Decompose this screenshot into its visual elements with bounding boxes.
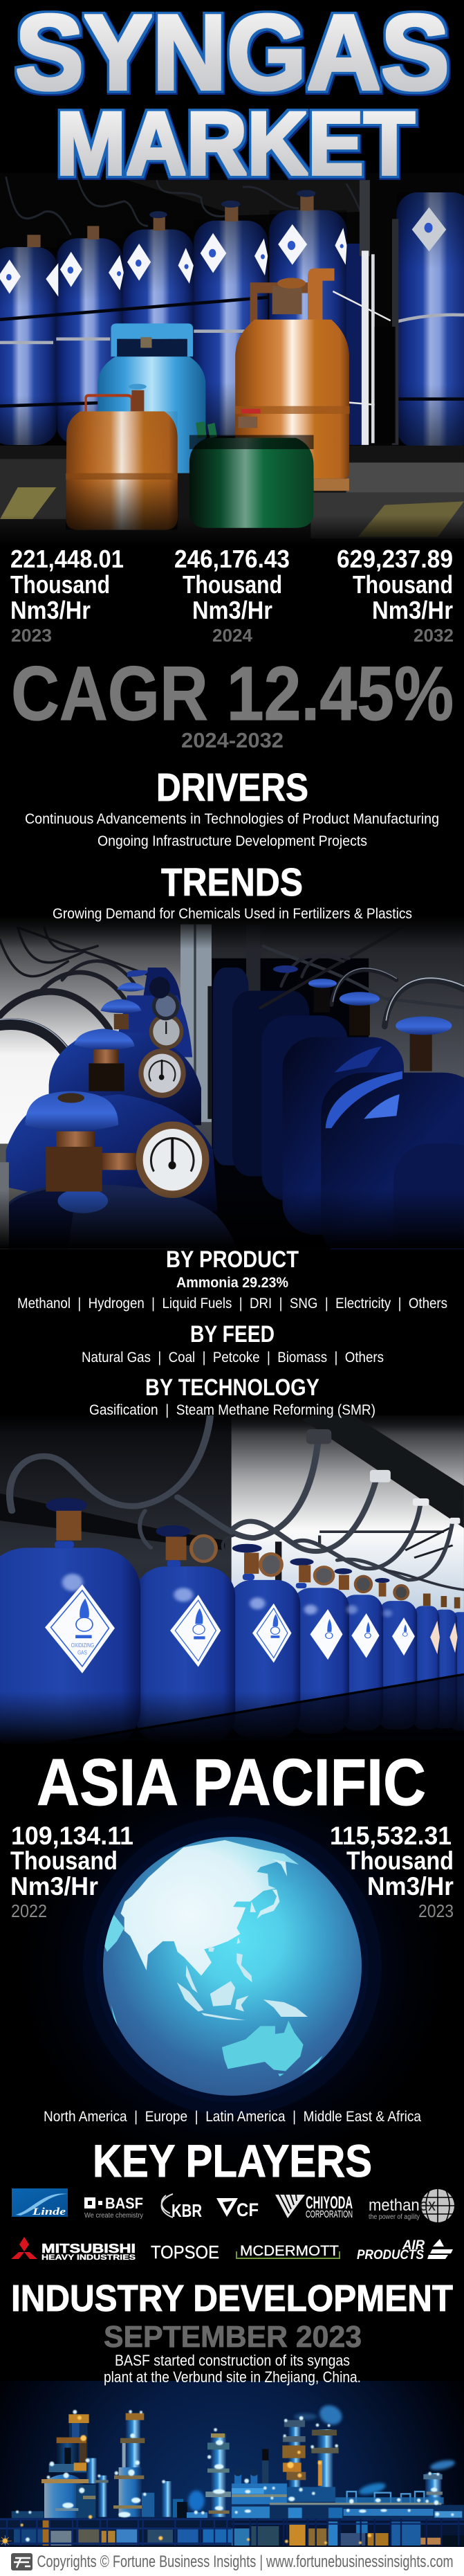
Japan and Korea	[250, 1859, 287, 1919]
lattice	[232, 2519, 464, 2547]
CAGR: 2024-2032	[181, 728, 284, 752]
by feed	[82, 1321, 384, 1366]
trends: Growing Demand for Chemicals Used in Fertilizers & Plastics	[53, 906, 412, 922]
by product	[17, 1246, 447, 1312]
by technology: BY TECHNOLOGY	[145, 1375, 319, 1401]
industry development: BASF started construction of its syngas	[115, 2352, 350, 2369]
towers	[234, 2420, 443, 2503]
photo: refinery at night	[0, 2381, 464, 2547]
logo: CF: CF	[236, 2199, 259, 2220]
logo: BASF: We create chemistry	[84, 2212, 143, 2220]
logo: Mitsubishi	[11, 2237, 136, 2262]
title: SYNGAS MARKET	[15, 0, 449, 194]
by technology: Gasification | Steam Methane Reforming (SMR)	[89, 1402, 375, 1418]
by product: Ammonia 29.23%	[176, 1275, 288, 1291]
lights	[235, 2416, 454, 2544]
cylinders right	[213, 968, 464, 1267]
logo: Linde: Linde	[32, 2206, 66, 2217]
footer bar	[0, 2547, 464, 2576]
refinery left half	[0, 2410, 232, 2547]
logo: KBR: KBR	[171, 2200, 202, 2221]
hoses left	[0, 927, 147, 1055]
logo: Chiyoda: CHIYODA	[306, 2193, 353, 2213]
green cylinder	[189, 409, 314, 528]
other regions: North America | Europe | Latin America | Middle East & Africa	[44, 2109, 421, 2125]
logo: Methanex: the power of agility	[369, 2213, 420, 2221]
process deck	[232, 2483, 464, 2519]
hazard labels	[45, 1584, 458, 1674]
logo: Chiyoda: CORPORATION	[306, 2208, 353, 2220]
logo: Mitsubishi: MITSUBISHI	[41, 2242, 136, 2256]
refinery right half	[232, 2402, 464, 2547]
key players heading: KEY PLAYERS	[93, 2135, 372, 2186]
drivers: DRIVERS	[156, 765, 308, 810]
statistic: 2032: 629,237.89	[337, 545, 453, 573]
drivers: Ongoing Infrastructure Development Projects	[98, 833, 367, 849]
right tower of left half	[205, 2433, 231, 2517]
statistic: 2022	[10, 1822, 133, 1921]
handwheels left	[25, 970, 148, 1192]
statistic: 2022: Thousand	[10, 1847, 118, 1875]
lattice	[0, 2518, 232, 2547]
logo: Chiyoda	[275, 2193, 353, 2220]
statistic: 2032: 2032	[414, 625, 454, 646]
industry development: plant at the Verbund site in Zhejiang, China.	[104, 2368, 361, 2386]
blue cylinder row	[0, 192, 464, 448]
left tower	[49, 2414, 89, 2473]
globe: Asia Pacific map	[103, 1837, 362, 2096]
blue cylinders	[0, 1541, 464, 1750]
statistic: 2024: 2024	[212, 625, 253, 646]
statistic: 2022: Nm3/Hr	[10, 1872, 98, 1901]
logo: BASF	[84, 2195, 143, 2220]
handwheels right	[273, 965, 452, 1071]
logo: Mitsubishi: HEAVY INDUSTRIES	[41, 2253, 136, 2262]
Australia	[222, 2021, 304, 2076]
light blue cylinder	[98, 323, 205, 473]
trends: TRENDS	[161, 860, 303, 905]
by feed: Natural Gas | Coal | Petcoke | Biomass | Others	[82, 1350, 384, 1366]
large orange cylinder	[235, 269, 350, 491]
New Guinea	[263, 1999, 308, 2017]
center tower	[113, 2413, 207, 2518]
statistic: 2023 region: Nm3/Hr	[367, 1872, 454, 1901]
logo: Linde	[12, 2188, 68, 2217]
logo: KBR	[162, 2194, 202, 2221]
Arabian peninsula	[104, 1915, 124, 1952]
valves and gauges	[46, 1498, 460, 1608]
by product: BY PRODUCT	[166, 1246, 299, 1273]
Southeast Asia islands	[177, 1937, 252, 2020]
smoke	[294, 2402, 456, 2497]
trends	[53, 860, 412, 922]
statistic: 2023: 2023	[11, 625, 52, 646]
logo: McDermott: MCDERMOTT	[240, 2243, 339, 2259]
drivers	[25, 765, 439, 849]
drivers: Continuous Advancements in Technologies of Product Manufacturing	[25, 811, 439, 827]
overhead pipe	[0, 1407, 464, 1586]
logo: BASF: BASF	[105, 2195, 143, 2212]
logo: Methanex	[369, 2189, 454, 2222]
Asia landmass	[121, 1840, 299, 1976]
statistic: 2024	[174, 545, 290, 646]
statistic: 2024: Thousand	[183, 570, 282, 599]
concrete floor	[0, 446, 464, 545]
globe halo rings	[83, 1817, 382, 2116]
hoses right	[259, 941, 464, 1030]
hazard diamonds	[0, 207, 446, 297]
statistic: 2022: 2022	[11, 1901, 47, 1921]
by technology	[89, 1375, 375, 1418]
left tank	[41, 2458, 109, 2518]
logo: CF	[216, 2198, 259, 2220]
hazard labels: OXIDIZING	[71, 1642, 94, 1649]
statistic: 2032	[337, 545, 454, 646]
statistic: 2023	[10, 545, 124, 646]
statistic: 2023: 221,448.01	[10, 545, 124, 573]
statistic: 2024: Nm3/Hr	[192, 596, 272, 624]
statistic: 2023: Thousand	[10, 570, 110, 599]
statistic: 2022: 109,134.11	[11, 1822, 133, 1850]
title: SYNGAS MARKET: MARKET	[56, 93, 415, 194]
photo: cylinder gauges	[0, 915, 464, 1267]
small orange cylinder	[66, 384, 178, 529]
lights	[3, 2410, 225, 2543]
silver bands and straps	[0, 291, 464, 406]
statistic: 2023: Nm3/Hr	[10, 596, 91, 624]
photo: gas cylinders	[0, 173, 464, 545]
steel rack	[360, 180, 398, 445]
logo: Air Products	[357, 2238, 453, 2262]
hazard labels: GAS	[77, 1649, 87, 1656]
logo: Methanex: methanex	[369, 2196, 436, 2215]
statistic: 2023 region: 2023	[418, 1901, 454, 1921]
logo: Air Products: PRODUCTS	[357, 2248, 424, 2262]
globe background glow	[1, 1741, 464, 2191]
region heading: ASIA PACIFIC	[37, 1745, 426, 1820]
industry development	[11, 2278, 453, 2386]
hoses	[10, 1417, 464, 1590]
reflective floor	[0, 1674, 464, 1751]
statistic: 2023 region: 115,532.31	[330, 1822, 452, 1850]
cylinders left	[0, 968, 236, 1249]
valves on blue cylinders	[27, 190, 316, 247]
statistic: 2024: 246,176.43	[174, 545, 290, 573]
statistic: 2023 region	[330, 1822, 454, 1921]
footer logo	[11, 2553, 33, 2570]
photo: cylinder row with hoses	[0, 1407, 464, 1764]
statistic: 2032: Nm3/Hr	[372, 596, 453, 624]
pressure gauges	[136, 977, 210, 1198]
industry development: SEPTEMBER 2023	[104, 2320, 362, 2354]
logo: Topsoe: TOPSOE	[151, 2242, 219, 2262]
by feed: BY FEED	[190, 1321, 275, 1348]
logo: Air Products: AIR	[402, 2238, 425, 2253]
